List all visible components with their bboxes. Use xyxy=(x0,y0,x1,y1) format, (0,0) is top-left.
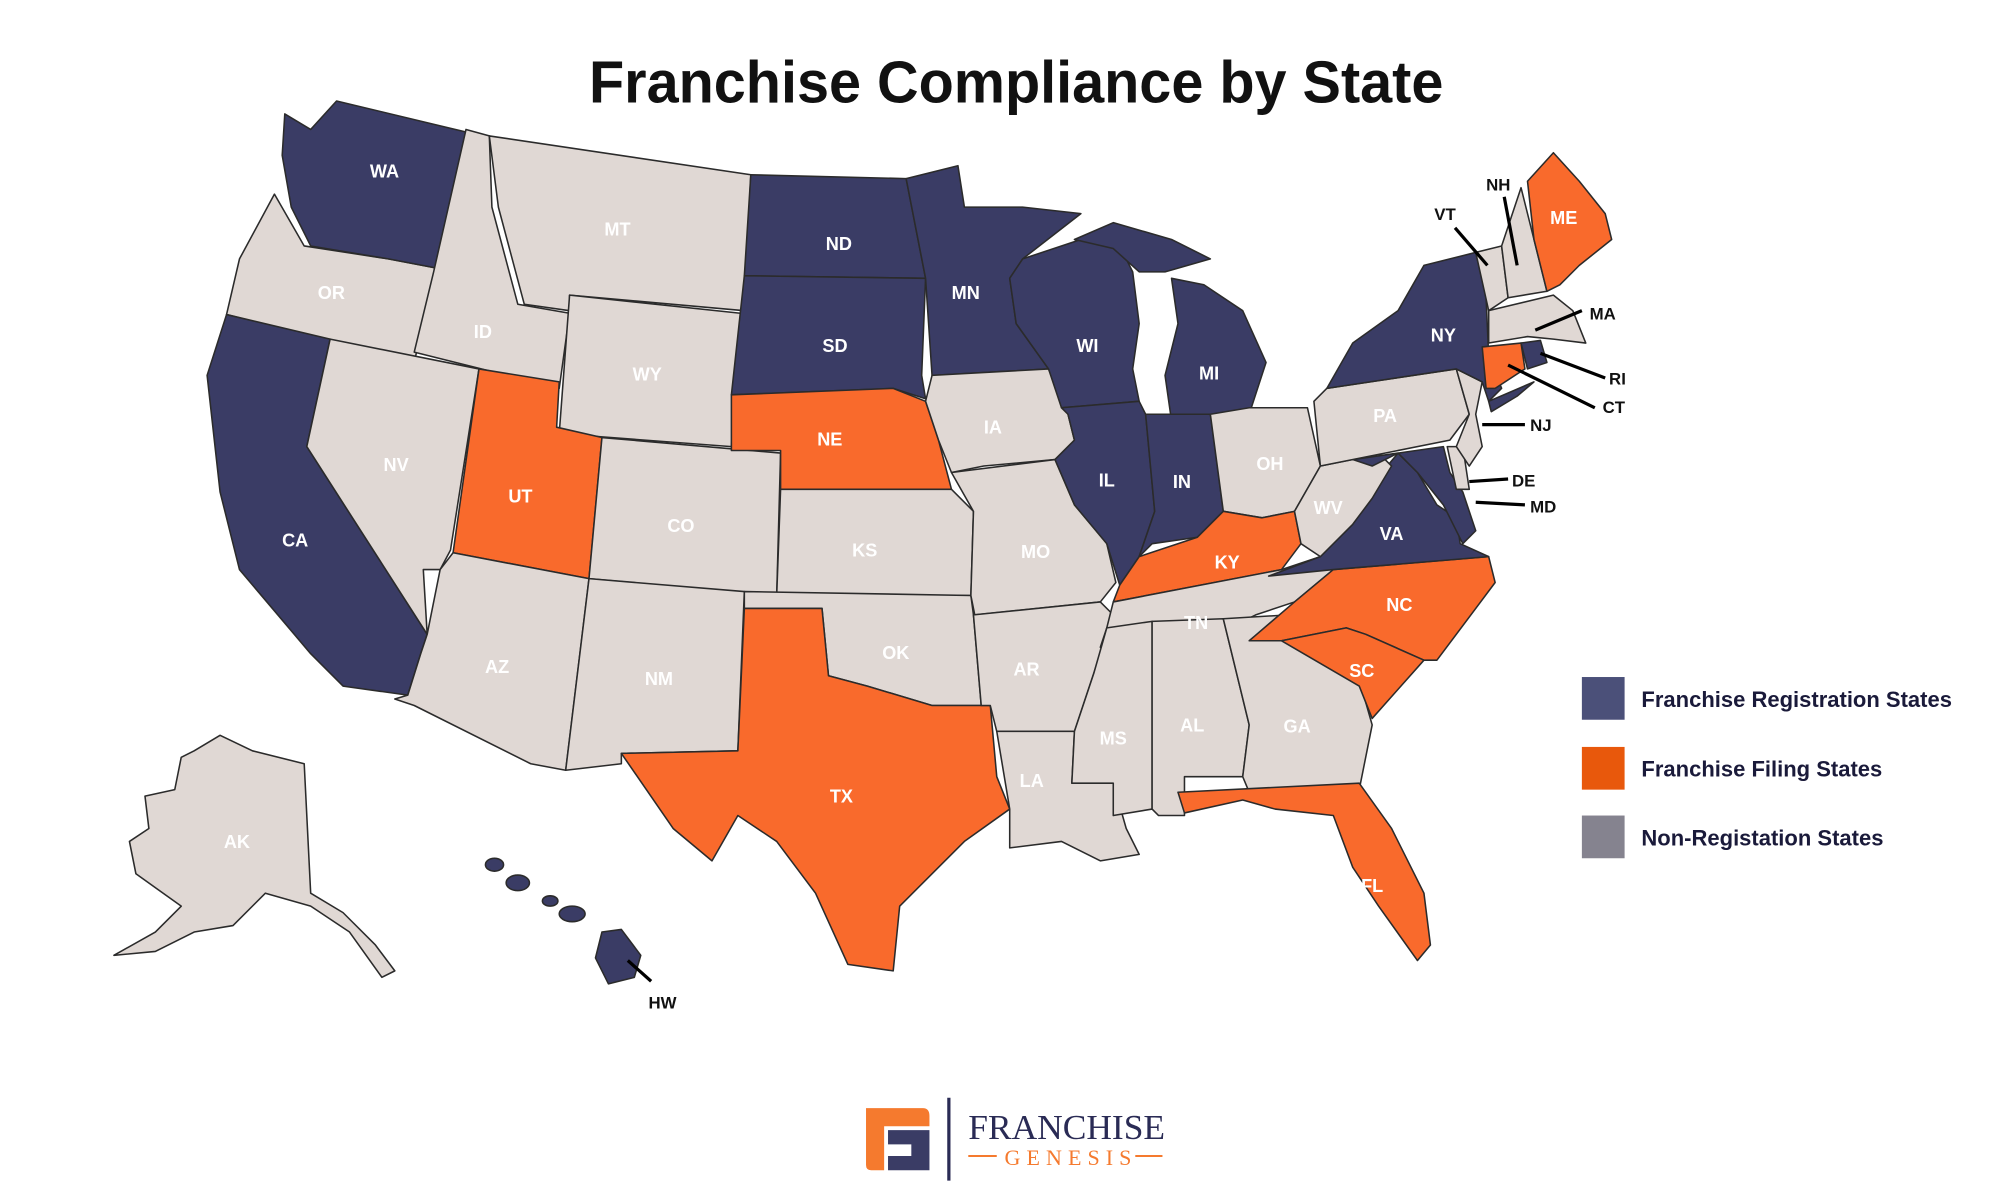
legend: Franchise Registration States xyxy=(1641,687,1952,712)
state labels: WV xyxy=(1314,498,1343,518)
map: US states xyxy=(114,101,1612,984)
state labels: KS xyxy=(852,541,877,561)
leader lines and small-state labels: MD xyxy=(1530,498,1556,517)
state labels: ND xyxy=(826,234,852,254)
legend: Franchise Filing States xyxy=(1641,757,1882,782)
logo: Franchise Genesis: FRANCHISE xyxy=(968,1108,1165,1147)
state labels: FL xyxy=(1361,876,1383,896)
state labels: WA xyxy=(370,161,399,181)
state labels: GA xyxy=(1284,717,1311,737)
state labels: OH xyxy=(1256,454,1283,474)
state labels: TN xyxy=(1184,613,1208,633)
state labels: LA xyxy=(1020,771,1044,791)
state labels: NE xyxy=(817,429,842,449)
legend: Non-Registation States xyxy=(1641,825,1883,850)
state labels: IA xyxy=(984,418,1002,438)
state labels: UT xyxy=(508,486,532,506)
state labels: WI xyxy=(1076,336,1098,356)
state labels: MT xyxy=(604,220,631,240)
state labels: IN xyxy=(1173,472,1191,492)
state labels: AL xyxy=(1180,715,1204,735)
state labels: NM xyxy=(645,669,673,689)
logo: Franchise Genesis xyxy=(866,1098,1165,1181)
leader lines and small-state labels: CT xyxy=(1603,398,1626,417)
state labels: SD xyxy=(822,336,848,356)
state labels: OR xyxy=(318,283,345,303)
state labels: AZ xyxy=(485,657,509,677)
state labels: WY xyxy=(633,365,662,385)
state labels xyxy=(224,161,1577,896)
state labels: MI xyxy=(1199,363,1219,383)
leader lines and small-state labels: HW xyxy=(649,993,677,1012)
state labels: SC xyxy=(1349,661,1374,681)
leader lines and small-state labels: NH xyxy=(1486,175,1510,194)
logo: Franchise Genesis: GENESIS xyxy=(1005,1145,1131,1170)
leader lines and small-state labels: NJ xyxy=(1530,416,1552,435)
state labels: MO xyxy=(1021,542,1050,562)
state labels: NY xyxy=(1431,326,1456,346)
state labels: PA xyxy=(1373,406,1397,426)
leader lines and small-state labels: DE xyxy=(1512,472,1535,491)
state labels: KY xyxy=(1215,552,1240,572)
state labels: VA xyxy=(1380,524,1403,544)
state labels: MN xyxy=(952,283,980,303)
state labels: CA xyxy=(282,530,308,550)
state labels: MS xyxy=(1100,728,1127,748)
state labels: NV xyxy=(384,455,409,475)
title: Franchise Compliance by State xyxy=(589,48,1443,115)
state labels: NC xyxy=(1386,595,1412,615)
leader lines and small-state labels: MA xyxy=(1590,305,1616,324)
leader lines and small-state labels: RI xyxy=(1609,369,1626,388)
state labels: TX xyxy=(830,787,853,807)
state labels: IL xyxy=(1099,471,1115,491)
leader lines and small-state labels: VT xyxy=(1434,205,1457,224)
state labels: OK xyxy=(882,643,909,663)
state labels: AR xyxy=(1013,660,1040,680)
state labels: AK xyxy=(224,832,250,852)
legend xyxy=(1582,677,1952,858)
leader lines and small-state labels xyxy=(628,175,1626,1012)
state labels: ID xyxy=(474,322,492,342)
state labels: ME xyxy=(1550,208,1577,228)
state labels: CO xyxy=(667,516,694,536)
